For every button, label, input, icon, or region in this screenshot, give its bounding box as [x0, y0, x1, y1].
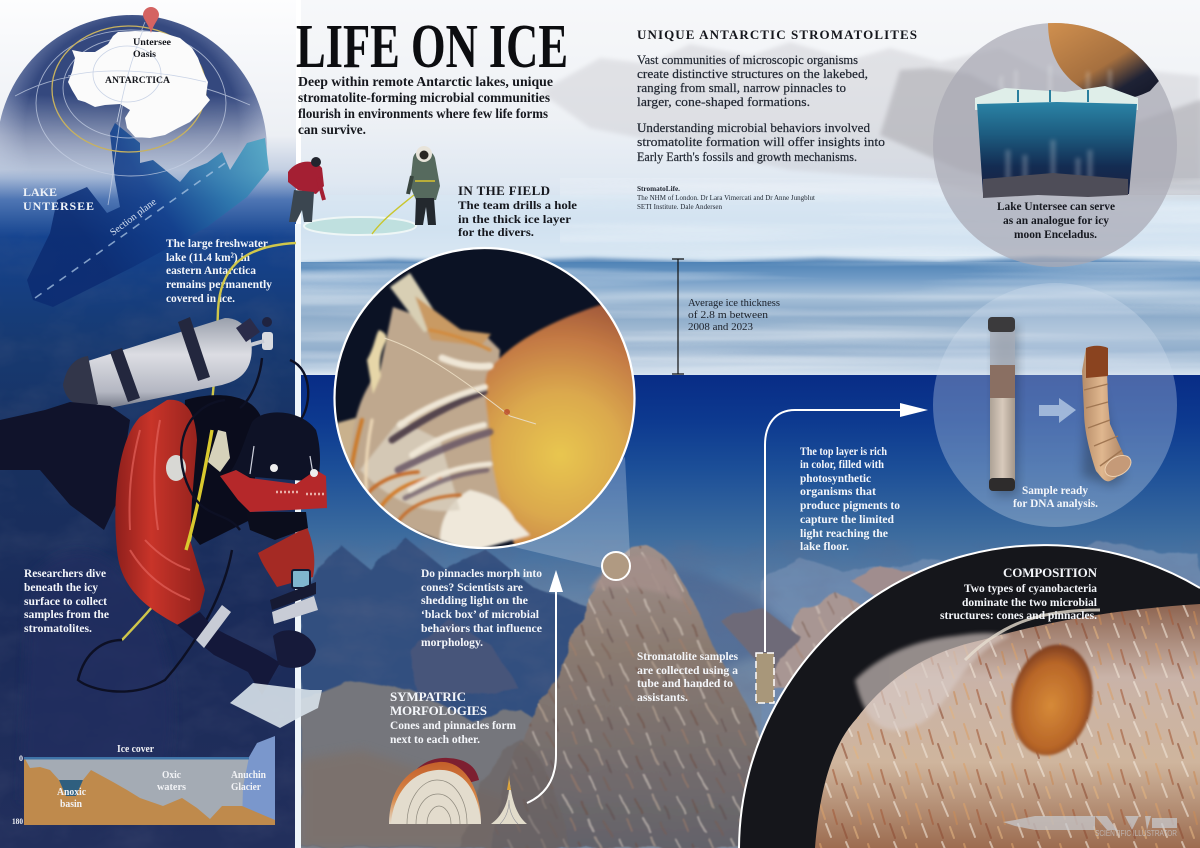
right glove — [273, 630, 316, 668]
sleeve folds — [129, 420, 190, 600]
shoulder patch — [166, 455, 186, 481]
researchers text: Researchers dive — [24, 566, 107, 580]
chart labels: Oxic — [162, 770, 181, 781]
water column — [301, 375, 1200, 848]
lake description: covered in ice. — [166, 291, 235, 305]
graticule — [15, 22, 250, 205]
lake untersee heading: LAKE — [23, 185, 57, 199]
credits — [637, 184, 816, 211]
description text — [637, 53, 885, 164]
researchers text: beneath the icy — [24, 580, 98, 594]
pinnacles question text: ‘black box’ of microbial — [421, 607, 540, 621]
sympatric morphologies text: MORFOLOGIES — [390, 703, 487, 718]
sympatric morphologies text: Cones and pinnacles form — [390, 718, 516, 732]
lake description — [166, 236, 272, 305]
central stromatolite cone — [497, 544, 760, 848]
description text: Early Earth's fossils and growth mechanisms. — [637, 150, 857, 164]
air tank — [63, 317, 273, 410]
composition circle — [730, 540, 1200, 848]
top layer text: in color, filled with — [800, 457, 884, 471]
arrow: tube to core — [1039, 398, 1076, 423]
small far cones — [410, 566, 945, 700]
top layer text: capture the limited — [800, 512, 894, 526]
rope — [372, 195, 414, 234]
intro text: stromatolite-forming microbial communities — [298, 91, 551, 106]
magnified view contents — [333, 248, 640, 560]
chart labels: basin — [60, 799, 82, 810]
chart labels — [12, 744, 266, 826]
sample collection text: are collected using a — [637, 663, 738, 677]
distant grey mountains — [301, 42, 1200, 238]
antarctica — [68, 31, 210, 138]
map pin — [143, 7, 159, 33]
top layer text: photosynthetic — [800, 471, 872, 485]
map labels — [105, 38, 171, 86]
sample caption: for DNA analysis. — [1013, 496, 1098, 510]
silver wrist band — [196, 605, 231, 648]
panel texture — [0, 230, 296, 848]
sample collection text — [637, 649, 738, 704]
pinnacles question text: cones? Scientists are — [421, 580, 524, 594]
lake description: lake (11.4 km²) in — [166, 250, 250, 264]
credits: The NHM of London. Dr Lara Vimercati and Dr Anne Jungblut — [637, 193, 816, 202]
section heading: unique stromatolites: UNIQUE ANTARCTIC STROMATOLITES — [637, 27, 917, 42]
chart labels: Ice cover — [117, 744, 154, 755]
lake untersee heading: UNTERSEE — [23, 199, 94, 213]
top layer text: produce pigments to — [800, 498, 900, 512]
sample collection text: assistants. — [637, 690, 688, 704]
sample collection text: Stromatolite samples — [637, 649, 738, 663]
pinnacles question text — [421, 566, 543, 649]
red sleeve arm — [115, 400, 205, 625]
intro text: can survive. — [298, 123, 366, 138]
illustrator logo: SCIENTIFIC ILLUSTRATOR — [1095, 829, 1177, 838]
circle backdrop — [933, 283, 1177, 527]
terrain — [24, 757, 275, 825]
mask details — [270, 464, 324, 494]
regulator — [246, 512, 308, 540]
enceladus caption: as an analogue for icy — [1003, 213, 1109, 227]
lake outline — [27, 123, 269, 307]
orange knob — [1009, 643, 1095, 758]
callout wedge — [510, 457, 630, 568]
enceladus caption — [997, 199, 1116, 241]
seabed texture — [333, 552, 552, 686]
shadow shapes behind diver — [20, 552, 172, 800]
top layer text — [800, 444, 900, 553]
ice thickness label: 2008 and 2023 — [688, 322, 753, 333]
chart labels: Anoxic — [57, 787, 86, 798]
chart labels: Anuchin — [231, 770, 266, 781]
description text: ranging from small, narrow pinnacles to — [637, 81, 846, 95]
morphing arrow — [527, 590, 556, 803]
pinnacles question text: behaviors that influence — [421, 621, 543, 635]
composition text: dominate the two microbial — [962, 595, 1098, 609]
top layer text: organisms that — [800, 484, 876, 498]
clip — [208, 430, 230, 472]
helmet — [228, 412, 320, 482]
jupiter-like moon — [1048, 23, 1159, 97]
ice thickness label — [688, 298, 780, 333]
enceladus caption: moon Enceladus. — [1014, 227, 1097, 241]
person in parka — [408, 146, 440, 225]
sympatric morphologies text: next to each other. — [390, 732, 480, 746]
sample caption — [1013, 483, 1098, 510]
right cuff — [272, 596, 318, 624]
antarctic circle — [52, 26, 206, 152]
chart labels: Glacier — [231, 782, 261, 793]
enceladus analogue circle — [933, 22, 1177, 267]
dive computer — [292, 570, 310, 588]
ice streaks — [301, 262, 1200, 376]
composition text: COMPOSITION — [1003, 565, 1098, 580]
description text: Understanding microbial behaviors involved — [637, 121, 871, 135]
top layer text: lake floor. — [800, 539, 849, 553]
pinnacle cross-section diagram — [491, 775, 527, 824]
description text: larger, cone-shaped formations. — [637, 95, 810, 109]
sky — [301, 0, 1200, 262]
lake description: The large freshwater — [166, 236, 269, 250]
seabed foreground — [301, 680, 646, 848]
magnified circle outline — [334, 248, 634, 548]
red mask frame — [220, 470, 327, 512]
umbilical line — [122, 243, 296, 640]
researchers text — [24, 566, 110, 635]
distant blue hills — [301, 538, 1200, 848]
circle backdrop — [933, 23, 1177, 267]
cracks — [1018, 90, 1088, 102]
sample circle — [933, 283, 1177, 527]
sample collection text: tube and handed to — [637, 676, 733, 690]
intro text: flourish in environments where few life forms — [298, 107, 548, 122]
ice thickness label: Average ice thickness — [688, 298, 780, 309]
person in red jacket — [288, 157, 324, 222]
ice cover band — [24, 757, 249, 760]
top layer text: light reaching the — [800, 526, 889, 540]
in the field text: for the divers. — [458, 225, 534, 239]
ice thickness label: of 2.8 m between — [688, 310, 768, 321]
left panel — [0, 0, 296, 848]
helmet straps — [250, 446, 314, 480]
section plane label: Section plane — [108, 196, 159, 238]
description text: Vast communities of microscopic organisms — [637, 53, 858, 67]
magnified dome contents — [730, 540, 1200, 848]
pinnacles question text: shedding light on the — [421, 593, 529, 607]
ocean block — [977, 102, 1137, 194]
description text: create distinctive structures on the lakebed, — [637, 67, 868, 81]
in the field text: The team drills a hole — [458, 198, 578, 212]
pinnacles question text: Do pinnacles morph into — [421, 566, 542, 580]
description text: stromatolite formation will offer insights into — [637, 135, 885, 149]
globe map — [0, 15, 267, 174]
panel divider — [295, 224, 301, 848]
cone cross-section diagram — [389, 758, 481, 824]
composition text: structures: cones and pinnacles. — [940, 608, 1097, 622]
lake untersee heading — [23, 185, 94, 213]
intro text — [298, 75, 553, 138]
torso — [180, 395, 262, 545]
ice shell — [975, 86, 1138, 110]
graticule over continent — [68, 30, 206, 122]
sky streaks — [560, 178, 1200, 256]
credits: StromatoLife. — [637, 184, 680, 193]
chart labels: 0 — [19, 754, 23, 763]
stromatolite core — [1082, 346, 1135, 486]
sampling box — [230, 683, 322, 728]
yellow harness line — [186, 430, 212, 550]
sample caption: Sample ready — [1022, 483, 1088, 497]
composition circle outline — [739, 545, 1200, 848]
globe disc — [0, 15, 267, 174]
credits: SETI Institute. Dale Andersen — [637, 202, 722, 211]
background scene — [301, 0, 1200, 848]
sympatric morphologies text: SYMPATRIC — [390, 689, 466, 704]
map labels: ANTARCTICA — [105, 76, 170, 86]
section plane — [35, 161, 228, 298]
zoom source circle — [602, 552, 630, 580]
ice layer — [301, 262, 1200, 376]
second red sleeve — [258, 527, 314, 587]
panel background — [0, 0, 296, 848]
ice hole — [304, 217, 416, 235]
plumes — [1000, 68, 1114, 90]
arrow head — [900, 403, 928, 417]
diver — [0, 243, 327, 728]
in the field text: IN THE FIELD — [458, 183, 550, 198]
bottom-left foreground ridge — [460, 738, 570, 848]
glacier — [242, 736, 275, 825]
ice thickness bracket — [672, 259, 684, 374]
pinnacles question text: morphology. — [421, 635, 483, 649]
title: LIFE ON ICE — [296, 13, 568, 81]
composition text — [940, 565, 1098, 622]
in the field text — [458, 183, 578, 239]
magnified stromatolite circle — [333, 248, 640, 560]
chart water — [24, 757, 275, 825]
composition text: Two types of cyanobacteria — [964, 581, 1097, 595]
illustrator logo — [1003, 816, 1177, 838]
researchers text: samples from the — [24, 607, 110, 621]
field scene: team on the ice — [288, 146, 440, 235]
enceladus caption: Lake Untersee can serve — [997, 199, 1116, 213]
researchers text: stromatolites. — [24, 621, 92, 635]
vent plumes — [1008, 140, 1090, 180]
morphing arrow head — [549, 570, 563, 592]
in the field text: in the thick ice layer — [458, 212, 572, 226]
seabed brown — [301, 752, 485, 848]
anoxic basin fill — [59, 780, 83, 800]
frozen lake horizon — [301, 255, 1200, 262]
researchers text: surface to collect — [24, 594, 107, 608]
map labels: Oasis — [133, 50, 156, 60]
sympatric morphologies text — [390, 689, 516, 746]
legs — [0, 402, 130, 530]
lake description: eastern Antarctica — [166, 263, 256, 277]
enceladus scene — [975, 22, 1174, 198]
chart labels: 180 — [12, 817, 23, 826]
right cuff band — [270, 582, 316, 610]
lake description: remains permanently — [166, 277, 272, 291]
top layer text: The top layer is rich — [800, 444, 887, 458]
sample collection arrow — [765, 410, 915, 652]
left glove — [177, 612, 280, 695]
hoses — [78, 358, 308, 692]
ocean floor — [983, 173, 1128, 198]
map labels: Untersee — [133, 38, 171, 48]
intro text: Deep within remote Antarctic lakes, unique — [298, 75, 553, 90]
chart labels: waters — [157, 782, 186, 793]
sample tube — [988, 317, 1018, 496]
depth chart — [12, 736, 275, 826]
sample tube marker — [756, 653, 774, 703]
